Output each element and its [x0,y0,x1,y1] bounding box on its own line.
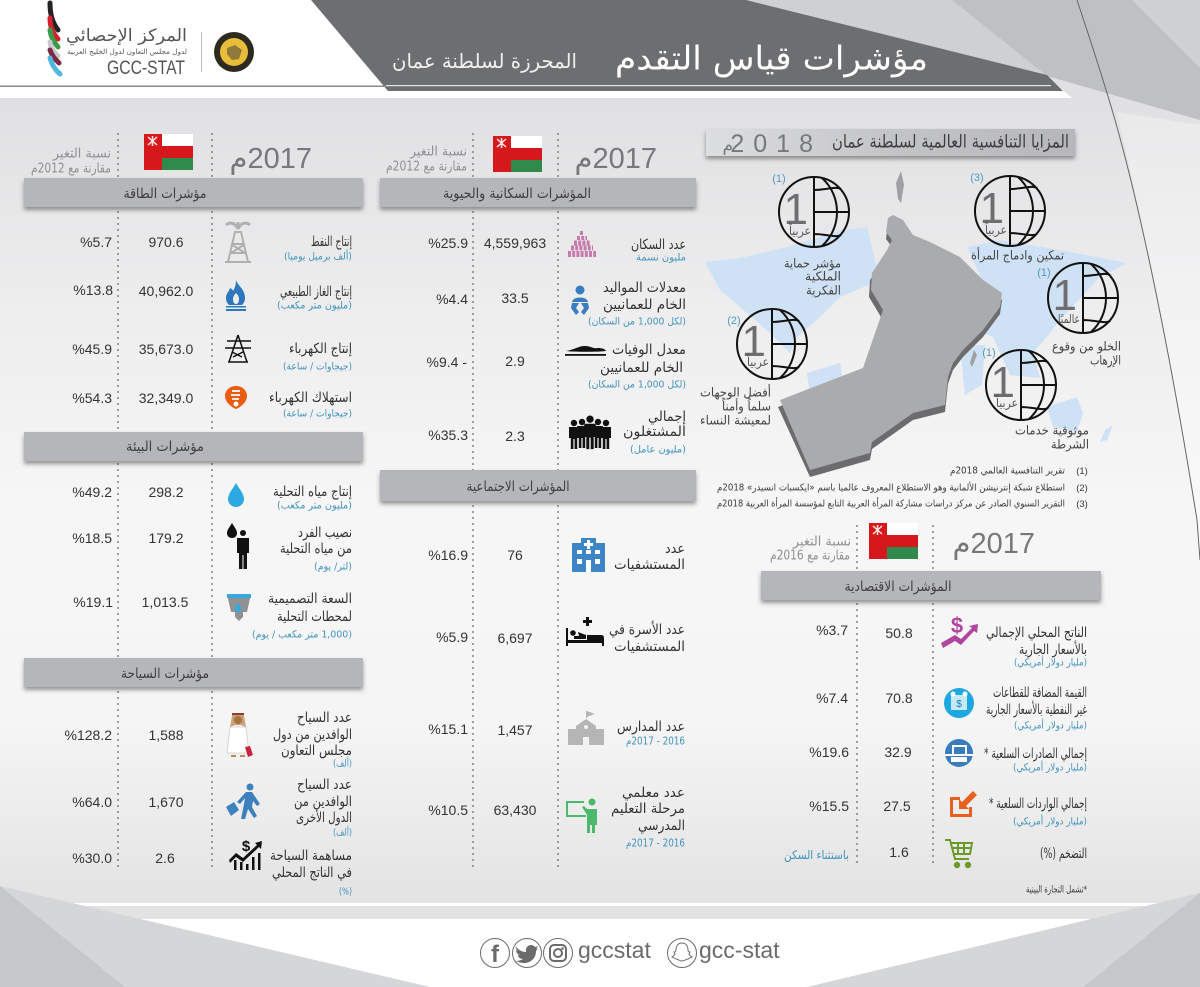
icon: water drop [228,483,244,507]
globe: best destinations for women: لمعيشة النساء [700,412,771,428]
row: birth rate: معدلات المواليد [603,280,686,296]
row: imports [809,791,1087,828]
section bar [761,571,1101,600]
row: birth rate: %4.4 [436,291,468,307]
row: birth rate: (لكل 1,000 من السكان) [588,316,686,328]
heading bar: م [722,136,733,156]
icon: imports [950,791,977,817]
row: hospitals: المستشفيات [614,557,685,573]
logo text: GCC-STAT: GCC-STAT [107,58,185,79]
icon: growth: $ [951,613,963,638]
globe: free of terrorism: 1 [1053,271,1077,320]
row: schools: عدد المدارس [617,719,685,735]
row: tourism contribution: (%) [339,886,352,898]
globe: free of terrorism: (1) [1037,267,1051,279]
header band [0,0,1200,560]
section bar [24,178,363,207]
handle: gcc-stat: gcc-stat [699,937,780,963]
row: per capita water: من مياه التحلية [280,541,352,557]
source notes: تقرير التنافسية العالمي 2018م [950,466,1065,476]
row: exports: (مليار دولار أمريكي) [1013,760,1087,774]
row: schools: 1,457 [497,722,533,738]
column header: مقارنة مع 2016م [770,548,850,564]
source notes: استطلاع شبكة إنترنيشن الألمانية وهو الاستطلاع المعروف عالميا باسم «ايكسبات انسيدر» 2018م [717,482,1065,494]
row: GDP: %3.7 [816,622,848,638]
row: other tourists: 1,670 [148,794,184,810]
icon: facebook: f [491,941,500,968]
row: GCC tourists [65,710,352,770]
globe: intellectual property: عربياً [789,222,811,239]
row: imports: %15.5 [809,798,849,814]
panel: economic indicators [761,523,1101,896]
icon: Gulf traveller [227,713,253,757]
row: imports: (مليار دولار أمريكي) [1013,814,1087,828]
row: natural gas [73,280,352,312]
globe: police reliability: (1) [982,347,996,359]
row: tourism contribution: 2.6 [155,850,175,866]
column header: نسبة التغير [792,534,851,550]
row: desalination capacity: %19.1 [73,594,113,610]
section bar [380,470,696,501]
row: per capita water: نصيب الفرد [298,525,352,541]
icon: exports [945,739,973,767]
source notes [717,466,1088,510]
icon: baby [571,286,589,315]
column header: 2017م [953,528,1035,560]
icon: school [568,711,604,745]
row: tourism contribution [72,838,352,898]
row: imports: 27.5 [883,798,911,814]
icon: tourism chart [229,838,262,870]
row: electricity production: (جيجاوات / ساعة) [283,362,352,372]
icon: ribbon [50,3,60,74]
footnote: *تشمل التجارة البينية [1026,884,1087,896]
row: desalination capacity: السعة التصميمية [268,591,352,607]
row: employed: إجمالي [648,409,686,425]
row: other tourists: الدول الأخرى [296,808,352,826]
row: death rate: %9.4 - [427,354,467,370]
globe: women empowerment: عربياً [985,221,1007,238]
row: teachers: عدد معلمي [622,785,685,801]
panel: competitive advantages [700,129,1127,510]
heading bar: 2018 [730,130,822,158]
column header: 2017م [230,143,312,175]
icon: growth [941,613,978,648]
row: death rate [427,342,686,390]
row: other tourists: %64.0 [72,794,112,810]
section bar: المؤشرات الاقتصادية [844,579,952,595]
logo text: centre name: المركز الإحصائي [66,26,187,46]
row: other tourists [72,777,352,838]
row: GDP [816,613,1087,668]
row: teachers [428,785,685,850]
row: hospital beds: %5.9 [436,629,468,645]
row: electricity consumption: (جيجاوات / ساعة) [283,408,352,420]
heading bar [706,129,1075,158]
row: population [428,233,686,264]
row: imports: إجمالي الواردات السلعية * [989,796,1087,812]
panel: population and vital indicators [380,133,696,868]
row: GCC tourists: %128.2 [65,727,112,743]
row: desalinated water: %49.2 [72,484,112,500]
globe: intellectual property [772,173,849,298]
row: electricity production: إنتاج الكهرباء [289,341,352,357]
row: non-oil value added: %7.4 [816,690,848,706]
globe: intellectual property: 1 [784,185,808,234]
row: electricity consumption [72,386,352,420]
row: electricity consumption: استهلاك الكهرباء [269,390,352,406]
logo text: council name: لدول مجلس التعاون لدول الخليج العربية [67,48,187,56]
row: death rate: 2.9 [505,353,525,369]
icon: pylon [225,335,251,362]
footer: social media [480,937,780,968]
section bar [380,178,696,207]
icon: traveller [226,784,260,819]
row: death rate: معدل الوفيات [612,342,686,358]
section bar: مؤشرات السياحة [121,666,209,682]
row: death rate: الخام للعمانيين [600,360,683,376]
row: GDP: (مليار دولار أمريكي) [1014,656,1087,668]
section bar: مؤشرات الطاقة [124,186,206,202]
row: hospitals [428,538,685,573]
subtitle: المحرزة لسلطنة عمان [392,49,577,73]
globe: free of terrorism: الخلو من وقوع [1052,338,1121,354]
globe: intellectual property: الفكرية [806,282,841,298]
row: non-oil value added: القيمة المضافة للقطاعات [993,685,1087,701]
row: other tourists: (ألف) [333,826,352,838]
icon: GCC emblem [214,32,254,72]
globe: best destinations for women [700,309,807,428]
globe: women empowerment [970,172,1064,264]
row: employed: %35.3 [428,427,468,443]
row: schools: %15.1 [428,721,468,737]
icon: lying body [565,346,606,356]
icon: bulb [225,386,247,409]
row: employed: المشتغلون [623,424,686,440]
section bar [24,432,363,461]
globe: police reliability [982,347,1089,452]
row: electricity consumption: %54.3 [72,390,112,406]
row: teachers: 2016 - 2017م [626,836,685,850]
row: exports: إجمالي الصادرات السلعية * [984,746,1087,762]
row: birth rate: الخام للعمانيين [603,297,686,313]
row: GCC tourists: الوافدين من دول [273,727,352,743]
column header [31,134,312,176]
row: tourism contribution: مساهمة السياحة [270,848,352,864]
source notes: التقرير السنوي الصادر عن مركز دراسات مشاركة المرأة العربية التابع لمؤسسة المرأة العربية 2018م [717,496,1065,510]
icon: hospital [572,538,605,572]
icon: tourism chart: $ [242,838,251,855]
icon: value added: $ [956,699,962,710]
row: desalinated water [72,483,352,512]
row: other tourists: عدد السياح [297,777,352,793]
row: electricity production: 35,673.0 [139,341,193,357]
row: death rate: (لكل 1,000 من السكان) [588,380,686,390]
row: oil production [80,222,352,262]
row: teachers: مرحلة التعليم [611,801,685,817]
row: per capita water: 179.2 [148,530,184,546]
globe: women empowerment: (3) [970,172,984,184]
row: employed [428,409,686,456]
globe: best destinations for women: سلماً وأمناً [722,397,771,414]
icon: person with drop [227,523,249,569]
row: inflation: التضخم (%) [1040,846,1087,862]
logo: GCC-STAT [50,3,254,79]
row: hospital beds [436,617,685,655]
row: natural gas: (مليون متر مكعب) [277,300,352,312]
icon: instagram [544,938,572,968]
row: non-oil value added: (مليار دولار أمريكي) [1014,718,1087,732]
row: employed: (مليون عامل) [630,444,686,456]
row: GCC tourists: مجلس التعاون [281,743,352,759]
row: teachers: %10.5 [428,802,468,818]
icon: teacher [566,798,597,833]
row: natural gas: %13.8 [73,282,113,298]
row: electricity consumption: 32,349.0 [139,390,193,406]
row: GDP: الناتج المحلي الإجمالي [986,625,1087,641]
row: desalination capacity: 1,013.5 [142,594,189,610]
globe: best destinations for women: 1 [742,317,766,366]
row: GDP: 50.8 [885,625,913,641]
row: per capita water: (لتر/ يوم) [314,562,352,572]
column header: نسبة التغير [52,146,111,162]
row: teachers: المدرسي [638,818,685,834]
panel: energy, environment and tourism [24,133,363,898]
column header: نسبة التغير [409,144,467,160]
row: employed: 2.3 [505,428,525,444]
icon: desalination filter [227,594,251,621]
globe: police reliability: 1 [991,358,1015,407]
row: population: 4,559,963 [484,235,546,251]
row: hospitals: %16.9 [428,547,468,563]
row: GCC tourists: 1,588 [148,727,184,743]
icon: cart [945,840,972,867]
icon: value added [944,688,974,718]
icon: gas flame [226,280,246,311]
row: population: عدد السكان [631,237,686,253]
row: desalination capacity: (1,000 متر مكعب / يوم) [252,630,352,640]
row: desalinated water: 298.2 [148,484,184,500]
globe: police reliability: عربياً [996,394,1018,411]
row: schools: 2016 - 2017م [626,734,685,748]
row: inflation [784,840,1087,867]
row: GCC tourists: عدد السياح [297,710,352,726]
map: world and Oman [705,171,1127,477]
row: desalinated water: (مليون متر مكعب) [277,500,352,512]
row: non-oil value added: غير النفطية بالأسعار الجارية [986,700,1087,718]
row: schools [428,711,685,748]
globe: women empowerment: 1 [980,184,1004,233]
row: tourism contribution: في الناتج المحلي [272,865,352,881]
row: population: مليون نسمة [636,252,686,264]
row: per capita water [72,523,352,572]
row: birth rate [436,280,686,328]
globe: police reliability: موثوقية خدمات [1015,422,1089,438]
section bar: المؤشرات الاجتماعية [466,479,570,495]
row: natural gas: 40,962.0 [139,283,193,299]
row: oil production: %5.7 [80,234,112,250]
row: hospitals: عدد [665,541,685,557]
globe: free of terrorism: الإرهاب [1090,352,1121,368]
row: oil production: (ألف برميل يوميا) [284,250,352,262]
globe: best destinations for women: (2) [727,315,741,327]
column header [770,523,1035,564]
row: GCC tourists: (ألف) [333,756,352,770]
globe: best destinations for women: أفضل الوجهات [700,384,771,400]
row: other tourists: الوافدين من [294,794,352,810]
row: desalinated water: إنتاج مياه التحلية [273,484,352,500]
section bar [24,658,363,687]
icon: twitter [512,938,542,968]
row: inflation: 1.6 [889,844,909,860]
globe: intellectual property: الملكية [805,268,841,284]
globe: free of terrorism: عالميًا [1058,312,1080,326]
row: electricity production [72,335,352,372]
section bar: المؤشرات السكانية والحيوية [443,186,591,202]
row: natural gas: إنتاج الغاز الطبيعي [280,284,352,300]
source notes: (2) [1076,483,1088,494]
globe: intellectual property: مؤشر حماية [784,256,841,272]
row: hospitals: 76 [507,547,523,563]
handle: gccstat: gccstat [578,937,651,963]
row: electricity production: %45.9 [72,341,112,357]
icon: oil rig [225,222,251,262]
icon: hospital bed [566,617,604,646]
row: non-oil value added [816,685,1087,732]
row: teachers: 63,430 [494,802,537,818]
section bar: مؤشرات البيئة [126,439,204,455]
icon: facebook [480,938,510,968]
row: non-oil value added: 70.8 [885,690,913,706]
icon: workers [569,416,611,449]
globe: women empowerment: تمكين وادماج المرأة [971,246,1064,264]
icon: population pyramid [568,233,596,254]
column header: 2017م [575,143,657,175]
globe: best destinations for women: عربياً [747,353,769,370]
row: exports: 32.9 [884,744,912,760]
column header: مقارنة مع 2012م [31,162,111,176]
row: population: %25.9 [428,235,468,251]
title: مؤشرات قياس التقدم [615,38,928,78]
row: inflation: باستثناء السكن [784,848,849,863]
icon: snapchat [668,938,696,968]
source notes: (3) [1076,499,1088,510]
row: per capita water: %18.5 [72,530,112,546]
row: hospital beds: المستشفيات [614,639,685,655]
row: hospital beds: 6,697 [497,630,533,646]
column header: مقارنة مع 2012م [386,160,467,174]
heading bar: المزايا التنافسية العالمية لسلطنة عمان [832,132,1069,152]
globe: police reliability: الشرطة [1051,436,1089,452]
row: hospital beds: عدد الأسرة في [609,620,685,638]
globe: free of terrorism [1037,263,1121,368]
row: oil production: إنتاج النفط [311,234,352,250]
globe: intellectual property: (1) [772,173,786,185]
row: desalination capacity [73,591,352,640]
row: tourism contribution: %30.0 [72,850,112,866]
row: oil production: 970.6 [148,234,184,250]
row: desalination capacity: لمحطات التحلية [277,609,352,625]
column header [386,136,657,175]
row: exports: %19.6 [809,744,849,760]
row: exports [809,739,1087,774]
row: GDP: بالأسعار الجارية [1019,640,1087,658]
row: birth rate: 33.5 [501,290,529,306]
source notes: (1) [1076,466,1088,477]
